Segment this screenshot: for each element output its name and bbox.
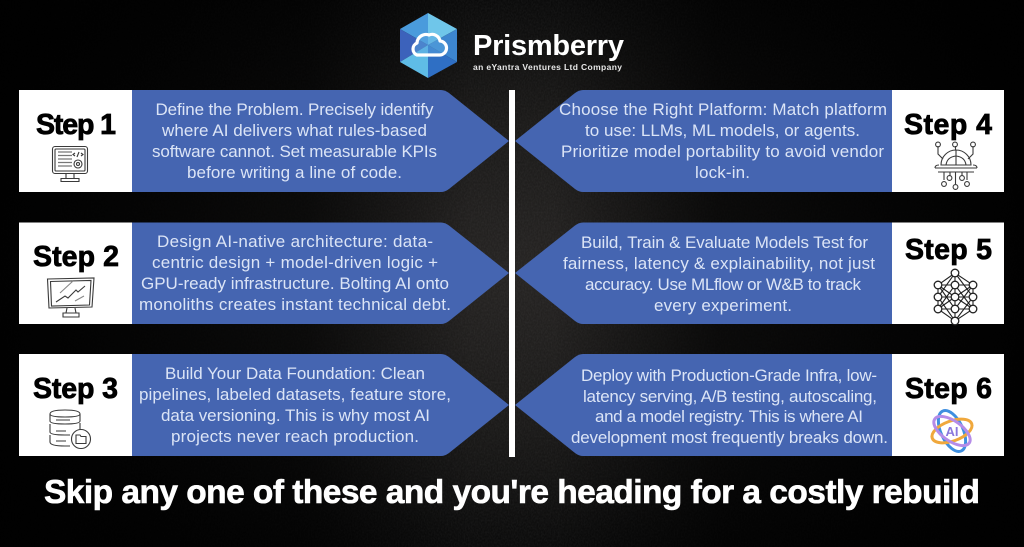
- step 2 heading: Step 2: [33, 241, 119, 273]
- step 4 arrow: [515, 90, 892, 192]
- icon: AI circuit dome: [935, 142, 977, 189]
- icon: neural network: [934, 269, 977, 325]
- icon: AI atom: AI: [946, 424, 958, 439]
- step 1 text: software cannot. Set measurable KPIs: [152, 142, 437, 161]
- icon: hexagon with cloud: [400, 13, 457, 78]
- footer headline: Skip any one of these and you're heading for a costly rebuild: [44, 474, 980, 511]
- step 2 white card: [19, 222, 132, 324]
- step 3 text: pipelines, labeled datasets, feature store,: [139, 385, 451, 404]
- step 1 white card: [19, 90, 132, 192]
- step 2 arrow: [132, 222, 509, 324]
- step 6 text: and a model registry. This is where AI: [595, 407, 863, 426]
- step 6 text: development most frequently breaks down.: [571, 428, 888, 447]
- step 6 text: [571, 366, 888, 447]
- step 2 text: monoliths creates instant technical debt.: [139, 295, 451, 314]
- panel: step 2: [19, 222, 509, 324]
- step 4 text: Prioritize model portability to avoid vendor: [561, 142, 884, 161]
- step 1 text: Define the Problem. Precisely identify: [156, 100, 434, 119]
- step 5 text: [563, 233, 875, 315]
- step 3 arrow: [132, 354, 509, 456]
- panel: step 3: [19, 354, 509, 456]
- step 6 white card: [892, 354, 1004, 456]
- step 5 text: fairness, latency & explainability, not just: [563, 254, 875, 273]
- icon: chart monitor: [48, 278, 94, 317]
- center divider: [509, 90, 515, 457]
- panel: step 6: [515, 354, 1004, 456]
- step 6 text: latency serving, A/B testing, autoscaling,: [583, 387, 877, 406]
- step 3 text: data versioning. This is why most AI: [161, 406, 430, 425]
- step 1 text: before writing a line of code.: [187, 163, 402, 182]
- step 6 heading: Step 6: [905, 373, 992, 405]
- step 5 text: accuracy. Use MLflow or W&B to track: [585, 275, 862, 294]
- step 3 text: Build Your Data Foundation: Clean: [165, 364, 425, 383]
- step 6 arrow: [515, 354, 892, 456]
- icon: AI atom: [929, 406, 975, 456]
- step 4 text: to use: LLMs, ML models, or agents.: [585, 121, 860, 140]
- step 5 text: Build, Train & Evaluate Models Test for: [581, 233, 868, 252]
- step 2 text: centric design + model-driven logic +: [152, 253, 438, 272]
- step 5 heading: Step 5: [905, 234, 992, 266]
- step 2 text: GPU-ready infrastructure. Bolting AI onto: [141, 274, 449, 293]
- step 5 arrow: [515, 222, 892, 324]
- panel: step 4: [515, 90, 1004, 192]
- logo wordmark: Prismberry: [473, 30, 624, 62]
- step 4 white card: [892, 90, 1004, 192]
- icon: code monitor: [52, 146, 88, 182]
- step 5 text: every experiment.: [654, 296, 792, 315]
- logo: Prismberry: [400, 13, 624, 78]
- step 5 white card: [892, 222, 1004, 324]
- step 4 text: Choose the Right Platform: Match platform: [559, 100, 887, 119]
- step 1 arrow: [132, 90, 509, 192]
- step 1 text: where AI delivers what rules-based: [161, 121, 427, 140]
- step 4 text: lock-in.: [695, 163, 750, 182]
- icon: database with folder: [50, 410, 90, 448]
- logo tagline: an eYantra Ventures Ltd Company: [473, 62, 622, 72]
- step 6 text: Deploy with Production-Grade Infra, low-: [581, 366, 877, 385]
- step 1 heading: Step 1: [36, 109, 116, 141]
- panel: step 5: [515, 222, 1004, 325]
- step 3 white card: [19, 354, 132, 456]
- panel: step 1: [19, 90, 509, 192]
- step 4 text: [559, 100, 887, 182]
- step 2 text: Design AI-native architecture: data-: [157, 232, 433, 251]
- step 2 text: [139, 232, 451, 314]
- step 3 text: projects never reach production.: [171, 427, 419, 446]
- step 3 heading: Step 3: [33, 373, 118, 405]
- step 3 text: [139, 364, 451, 446]
- step 4 heading: Step 4: [904, 109, 992, 141]
- step 1 text: [152, 100, 437, 182]
